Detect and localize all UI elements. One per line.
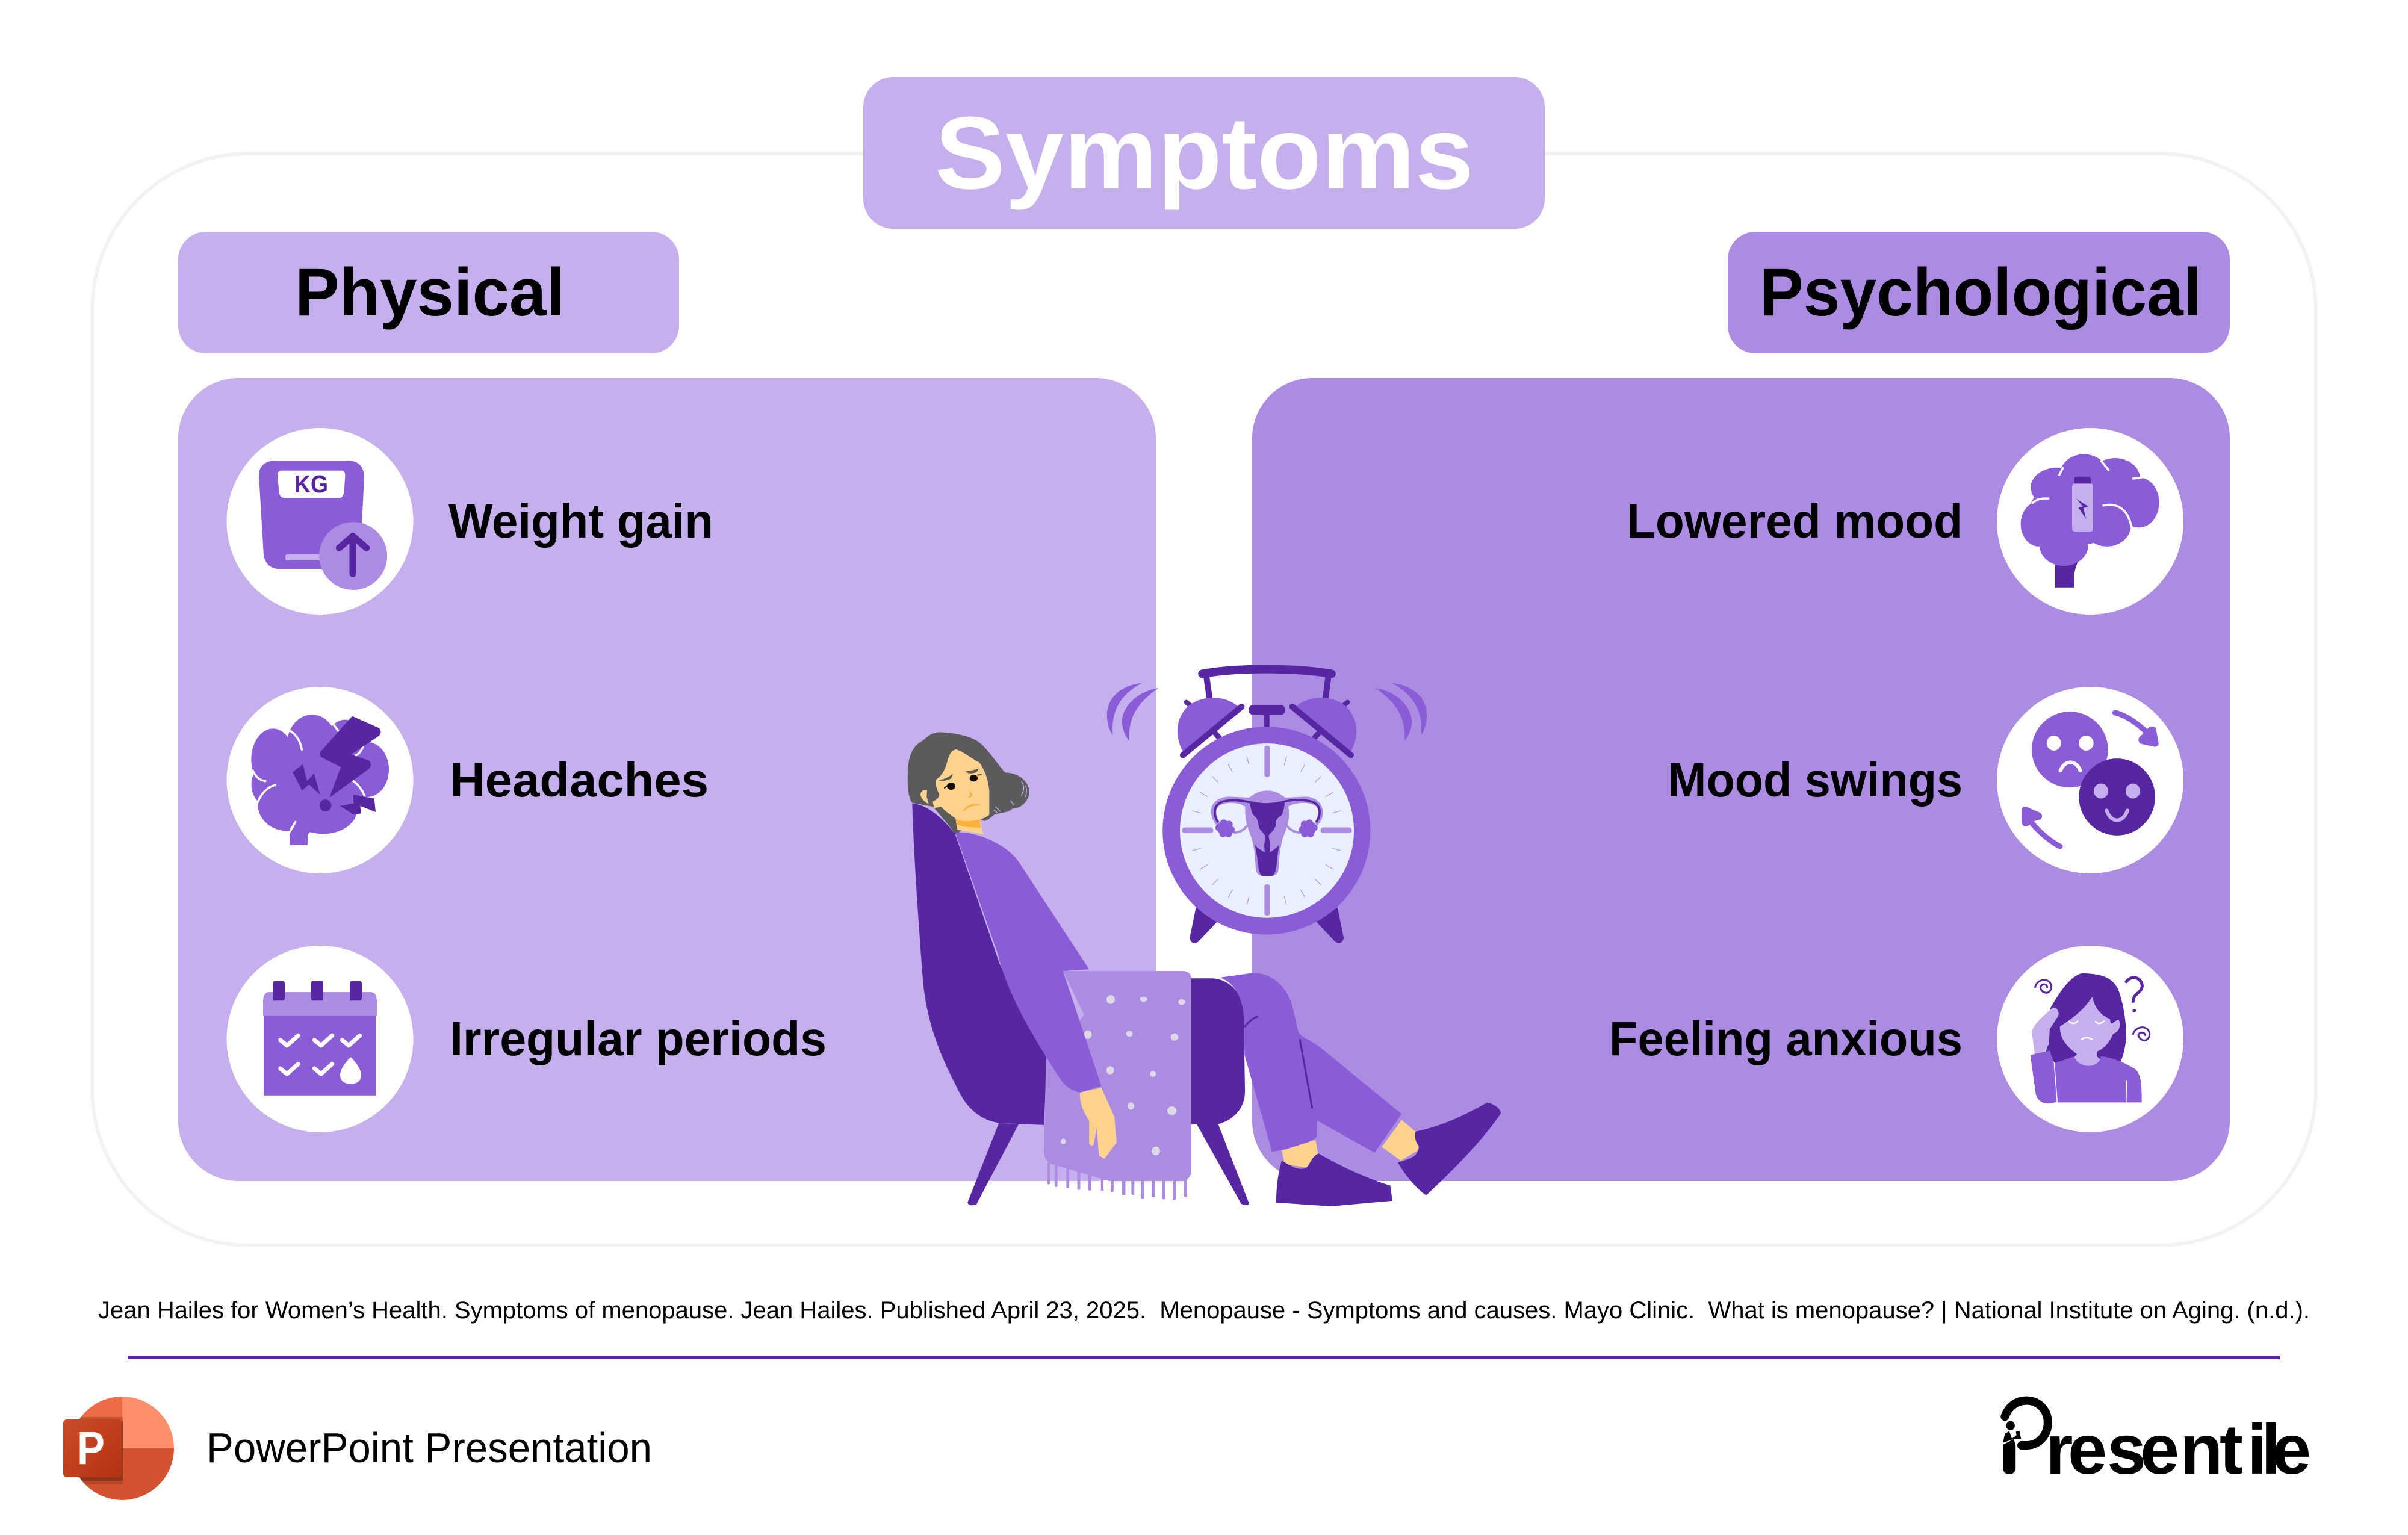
- icon circle: feeling anxious: [1997, 946, 2183, 1132]
- text: Mood swings: Mood swings: [1668, 753, 1963, 807]
- icon: sad and happy faces: [2022, 712, 2159, 846]
- panel: physical symptoms: [178, 378, 1156, 1181]
- illustration: tired woman in armchair: [908, 732, 1501, 1206]
- icon circle: lowered mood: [1997, 428, 2183, 615]
- title: Symptoms: Symptoms: [935, 96, 1474, 211]
- illustration: alarm clock: [1107, 669, 1427, 943]
- clock minute ticks: [1192, 756, 1341, 905]
- text: references: Jean Hailes for Women’s Health. Symptoms of menopause. Jean Hailes. Published April 23, 2025. Menopause - Symptoms and causes. Mayo Clinic. What is menopause? | National Institute on Aging. (n.d.).: [98, 1297, 2310, 1324]
- text: Headaches: Headaches: [450, 753, 709, 807]
- icon: anxious woman: [2031, 973, 2150, 1103]
- chair seat and legs: [912, 803, 1249, 1205]
- icon circle: headaches: [226, 687, 413, 873]
- heading: Psychological: Psychological: [1760, 255, 2202, 330]
- icon circle: weight gain: [226, 428, 413, 615]
- text: Feeling anxious: Feeling anxious: [1609, 1012, 1963, 1065]
- divider line: [128, 1356, 2280, 1359]
- blanket: [1044, 971, 1191, 1181]
- icon: uterus on clock face: [1211, 790, 1323, 876]
- heading: Psychological: [1728, 232, 2230, 353]
- icon: brain with low battery: [2021, 454, 2159, 588]
- panel: psychological symptoms: [1252, 378, 2230, 1181]
- text: PowerPoint Presentation: PowerPoint Presentation: [206, 1424, 652, 1471]
- text: Irregular periods: Irregular periods: [450, 1012, 827, 1065]
- icon: brain with lightning: [251, 715, 389, 845]
- panel: outer card: [92, 154, 2316, 1245]
- icon circle: mood swings: [1997, 687, 2183, 873]
- woman trousers: [1219, 973, 1401, 1153]
- text: Weight gain: Weight gain: [448, 494, 713, 548]
- woman ankles: [1282, 1120, 1419, 1168]
- heading: Physical: [178, 232, 679, 353]
- woman sweater and arm: [955, 833, 1102, 1093]
- label: KG: KG: [294, 470, 328, 498]
- heading: Physical: Physical: [295, 255, 565, 330]
- icon: PowerPoint logo: [63, 1397, 174, 1500]
- icon: weighing scale with up arrow: [259, 460, 387, 590]
- woman head: [908, 732, 1029, 835]
- icon circle: irregular periods: [226, 946, 413, 1132]
- text: Lowered mood: Lowered mood: [1627, 494, 1963, 548]
- icon: PowerPoint logo: P: [77, 1422, 105, 1474]
- clock handle and bells: [1178, 669, 1356, 943]
- title: Symptoms: [863, 77, 1545, 229]
- icon: ringing arcs: [1107, 683, 1427, 740]
- logo: Presentile: resentile: [2046, 1410, 2311, 1489]
- blanket fringe: [1047, 1162, 1187, 1200]
- woman hand: [1080, 1088, 1117, 1159]
- woman shoes: [1276, 1102, 1501, 1206]
- icon: calendar with checks and drop: [263, 981, 377, 1096]
- clock body and face: [1162, 727, 1370, 935]
